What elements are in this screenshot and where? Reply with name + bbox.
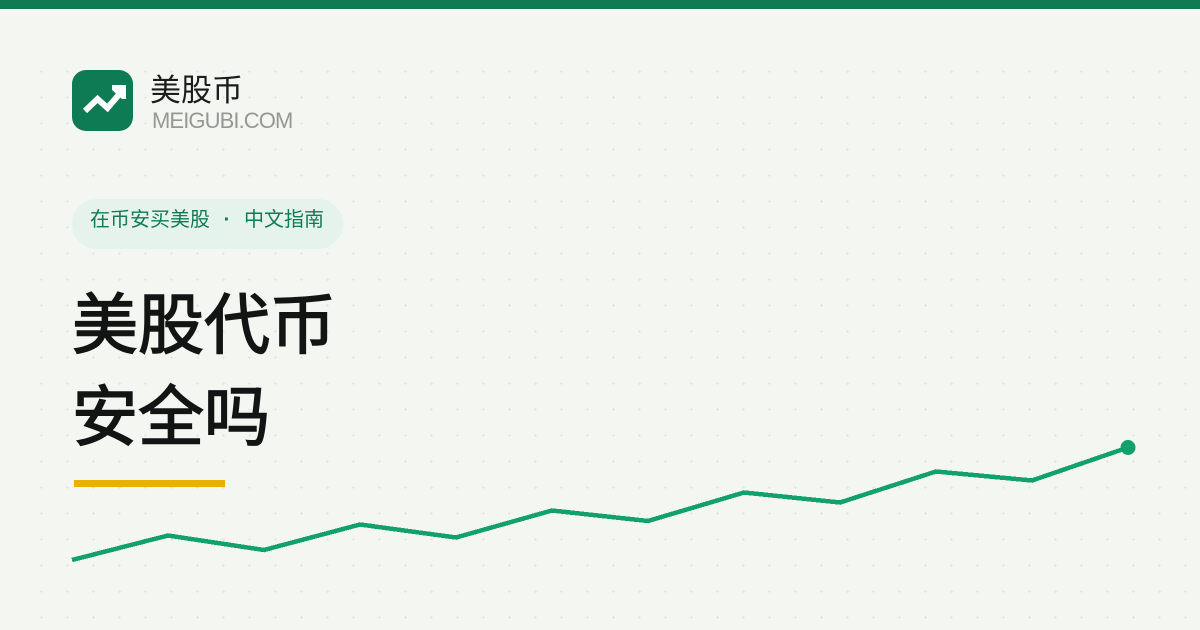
main title: 美股代币 [72,288,336,362]
brand name: 美股币 [150,73,243,108]
tag pill text: 在币安买美股 中文指南 [90,209,324,231]
main title: 安全吗 [72,380,270,454]
logo icon: rising arrow [72,70,133,131]
tag pill text: · [224,209,230,231]
brand domain: MEIGUBI.COM [152,108,292,133]
main title [72,288,336,454]
tag pill [72,199,343,249]
top accent bar [0,0,1200,9]
title underline [74,480,225,487]
